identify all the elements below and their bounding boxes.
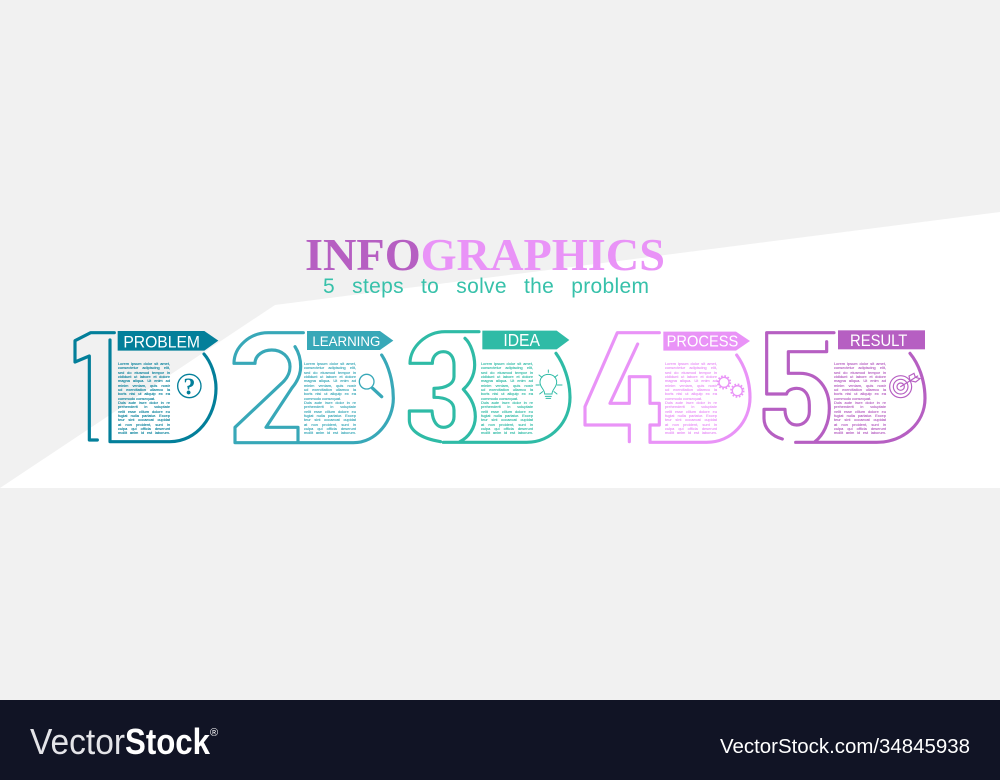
panel: step 2 learning: commodo consequat.	[304, 396, 341, 401]
panel: step 5 result: at non proident, sunt in	[834, 422, 886, 427]
panel: step 5 result: consectetur adipiscing elit,	[834, 365, 886, 370]
panel: step 5 result: fugiat nulla pariatur. Excep	[834, 413, 886, 418]
panel: step 3 idea: mollit anim id est laborum.	[481, 430, 533, 435]
footer logo and image id: VectorStock.com/34845938	[720, 736, 970, 758]
panel: step 3 idea: ud exercitation ullamco la	[481, 387, 533, 392]
panel: step 5 result: ud exercitation ullamco la	[834, 387, 886, 392]
panel: step 1 problem: boris nisi ut aliquip ex ea Duis aute irure dolor in re	[118, 391, 170, 405]
panel: step 5 result: Lorem ipsum dolor sit amet,	[834, 361, 886, 366]
panel: step 1 problem	[73, 331, 218, 444]
panel: step 3 idea: teur sint occaecat cupidat	[481, 417, 533, 422]
panel: step 1 problem: prehenderit in voluptate	[118, 404, 170, 409]
panel: step 2 learning: sed do eiusmod tempor in	[304, 370, 356, 375]
panel: step 4 process: at non proident, sunt in	[665, 422, 717, 427]
panel: step 4 process: culpa qui officia deserunt	[665, 426, 717, 431]
panel: step 5 result: cididunt ut labore et dolore	[834, 374, 886, 379]
panel: step 2 learning: Lorem ipsum dolor sit amet,	[304, 361, 356, 366]
panel: step 1 problem: PROBLEM	[123, 332, 200, 351]
panel: step 1 problem: cididunt ut labore et dolore	[118, 374, 170, 379]
panel: step 2 learning	[232, 331, 395, 444]
panel: step 4 process: mollit anim id est laborum.	[665, 430, 717, 435]
panel: step 2 learning: boris nisi ut aliquip ex ea Duis aute irure dolor in re	[304, 391, 356, 405]
panel: step 3 idea: cididunt ut labore et dolore	[481, 374, 533, 379]
panel: step 2 learning: teur sint occaecat cupidat	[304, 417, 356, 422]
panel: step 2 learning: LEARNING	[312, 333, 380, 349]
panel: step 3 idea: sed do eiusmod tempor in	[481, 370, 533, 375]
panel: step 4 process: prehenderit in voluptate	[665, 404, 717, 409]
footer logo and image id: ®	[210, 727, 218, 739]
panel: step 3 idea: magna aliqua. Ut enim ad	[481, 378, 533, 383]
panel: step 4 process: commodo consequat.	[665, 396, 702, 401]
panel: step 3 idea: fugiat nulla pariatur. Excep	[481, 413, 533, 418]
panel: step 1 problem: magna aliqua. Ut enim ad	[118, 378, 170, 383]
panel: step 2 learning: culpa qui officia deserunt	[304, 426, 356, 431]
panel: step 5 result: magna aliqua. Ut enim ad	[834, 378, 886, 383]
panel: step 2 learning: mollit anim id est laborum.	[304, 430, 356, 435]
panel: step 4 process: velit esse cillum dolore eu	[665, 409, 717, 414]
panel: step 4 process: consectetur adipiscing elit,	[665, 365, 717, 370]
panel: step 5 result: RESULT	[850, 331, 907, 350]
panel: step 1 problem: consectetur adipiscing elit,	[118, 365, 170, 370]
panel: step 5 result: boris nisi ut aliquip ex ea Duis aute irure dolor in re	[834, 391, 886, 405]
panel: step 1 problem: ?	[183, 375, 195, 401]
panel: step 3 idea: consectetur adipiscing elit,	[481, 365, 533, 370]
panel: step 5 result: prehenderit in voluptate	[834, 404, 886, 409]
footer logo and image id: Stock	[125, 721, 211, 762]
panel: step 3 idea: boris nisi ut aliquip ex ea Duis aute irure dolor in re	[481, 391, 533, 405]
panel: step 3 idea: Lorem ipsum dolor sit amet,	[481, 361, 533, 366]
panel: step 4 process: fugiat nulla pariatur. Excep	[665, 413, 717, 418]
panel: step 5 result	[762, 330, 927, 444]
panel: step 3 idea: prehenderit in voluptate	[481, 404, 533, 409]
panel: step 1 problem: ud exercitation ullamco la	[118, 387, 170, 392]
subtitle: 5 steps to solve the problem	[323, 275, 649, 298]
panel: step 2 learning: ud exercitation ullamco la	[304, 387, 356, 392]
panel: step 3 idea: commodo consequat.	[481, 396, 518, 401]
panel: step 5 result: commodo consequat.	[834, 396, 871, 401]
panel: step 1 problem: fugiat nulla pariatur. Excep	[118, 413, 170, 418]
panel: step 2 learning: prehenderit in voluptate	[304, 404, 356, 409]
panel: step 5 result: sed do eiusmod tempor in	[834, 370, 886, 375]
panel: step 1 problem: culpa qui officia deserunt	[118, 426, 170, 431]
footer bar	[0, 700, 1000, 780]
panel: step 3 idea: at non proident, sunt in	[481, 422, 533, 427]
panel: step 1 problem: teur sint occaecat cupidat	[118, 417, 170, 422]
panel: step 2 learning: cididunt ut labore et dolore	[304, 374, 356, 379]
panel: step 5 result: mollit anim id est laborum.	[834, 430, 886, 435]
panel: step 5 result: culpa qui officia deserunt	[834, 426, 886, 431]
panel: step 2 learning: at non proident, sunt in	[304, 422, 356, 427]
panel: step 1 problem: sed do eiusmod tempor in	[118, 370, 170, 375]
panel: step 4 process: PROCESS	[667, 334, 738, 351]
panel: step 4 process: minim veniam, quis nostr	[665, 383, 717, 388]
panel: step 2 learning: consectetur adipiscing elit,	[304, 365, 356, 370]
panel: step 1 problem: velit esse cillum dolore eu	[118, 409, 170, 414]
panel: step 4 process: cididunt ut labore et dolore	[665, 374, 717, 379]
panel: step 1 problem: minim veniam, quis nostr	[118, 383, 170, 388]
panel: step 2 learning: fugiat nulla pariatur. Excep	[304, 413, 356, 418]
panel: step 3 idea: velit esse cillum dolore eu	[481, 409, 533, 414]
panel: step 4 process: boris nisi ut aliquip ex ea Duis aute irure dolor in re	[665, 391, 717, 405]
panel: step 1 problem: commodo consequat.	[118, 396, 155, 401]
panel: step 2 learning: velit esse cillum dolore eu	[304, 409, 356, 414]
panel: step 2 learning: minim veniam, quis nostr	[304, 383, 356, 388]
panel: step 5 result: velit esse cillum dolore eu	[834, 409, 886, 414]
panel: step 5 result: teur sint occaecat cupidat	[834, 417, 886, 422]
panel: step 3 idea	[408, 330, 572, 444]
footer logo and image id	[30, 721, 970, 762]
panel: step 4 process: magna aliqua. Ut enim ad	[665, 378, 717, 383]
panel: step 5 result: minim veniam, quis nostr	[834, 383, 886, 388]
panel: step 1 problem: at non proident, sunt in	[118, 422, 170, 427]
footer logo and image id: Vector	[30, 721, 125, 762]
panel: step 3 idea: IDEA	[503, 330, 540, 350]
panel: step 1 problem: Lorem ipsum dolor sit amet,	[118, 361, 170, 366]
panel: step 1 problem: mollit anim id est laborum.	[118, 430, 170, 435]
panel: step 3 idea: culpa qui officia deserunt	[481, 426, 533, 431]
panel: step 2 learning: magna aliqua. Ut enim ad	[304, 378, 356, 383]
panel: step 4 process	[583, 331, 752, 444]
panel: step 4 process: teur sint occaecat cupidat	[665, 417, 717, 422]
panel: step 4 process: ud exercitation ullamco la	[665, 387, 717, 392]
panel: step 4 process: Lorem ipsum dolor sit amet,	[665, 361, 717, 366]
panel: step 4 process: sed do eiusmod tempor in	[665, 370, 717, 375]
panel: step 3 idea: minim veniam, quis nostr	[481, 383, 533, 388]
